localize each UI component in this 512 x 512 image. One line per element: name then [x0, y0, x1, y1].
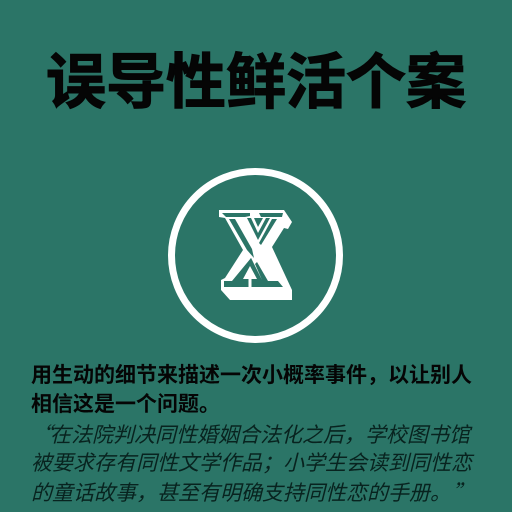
italic quote line 2: 被要求存有同性文学作品；小学生会读到同性恋	[31, 452, 472, 475]
icon: slab serif X	[219, 210, 292, 300]
bold statement line 2: 相信这是一个问题。	[31, 393, 220, 416]
body text	[31, 364, 474, 507]
italic quote line 3: 的童话故事，甚至有明确支持同性恋的手册。 ”	[31, 477, 474, 507]
bold statement line 1: 用生动的细节来描述一次小概率事件，以让别人	[31, 364, 472, 387]
title: 误导性鲜活个案	[46, 49, 466, 116]
italic quote line 1: “在法院判决同性婚姻合法化之后，学校图书馆	[31, 419, 470, 449]
icon ring	[172, 172, 340, 340]
